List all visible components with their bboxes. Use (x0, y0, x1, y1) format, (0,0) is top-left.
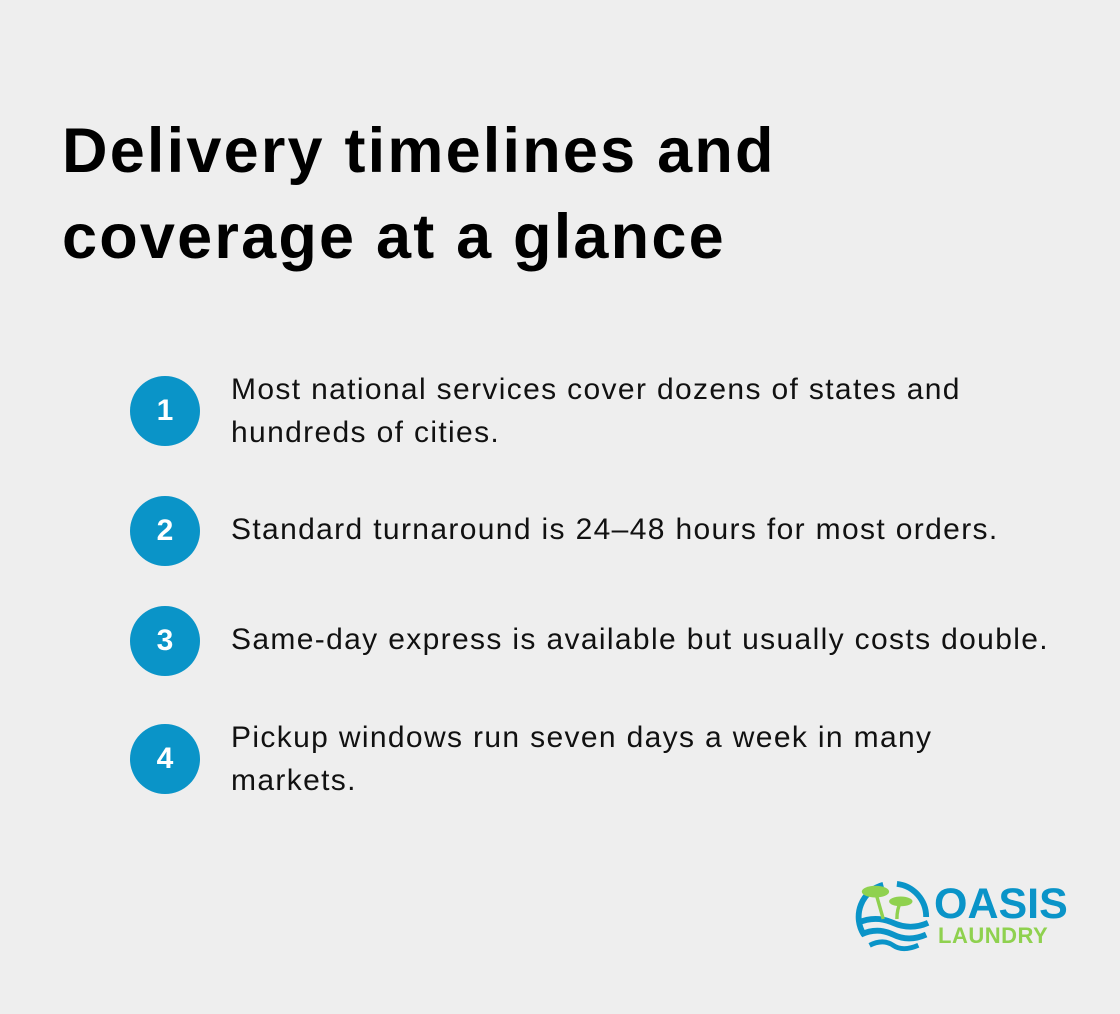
text 4: markets. (231, 764, 357, 797)
logo: LAUNDRY (938, 923, 1048, 948)
text 4: Pickup windows run seven days a week in many (231, 721, 932, 754)
title: coverage at a glance (62, 202, 726, 272)
badge 1 (130, 376, 200, 446)
text 1: hundreds of cities. (231, 416, 500, 449)
badge 4: 4 (157, 742, 173, 775)
badge 3 (130, 606, 200, 676)
badge 4 (130, 724, 200, 794)
badge 1: 1 (157, 394, 173, 427)
badge 2 (130, 496, 200, 566)
title: Delivery timelines and (62, 116, 776, 186)
text 1: Most national services cover dozens of states and (231, 373, 961, 406)
text 1 (231, 373, 961, 449)
badge 3: 3 (157, 624, 173, 657)
text 4 (231, 721, 932, 797)
text 2: Standard turnaround is 24–48 hours for most orders. (231, 513, 999, 546)
text 3: Same-day express is available but usually costs double. (231, 623, 1049, 656)
badge 2: 2 (157, 514, 173, 547)
icon: palm circle (856, 881, 930, 952)
logo text: OASIS (934, 880, 1068, 928)
title (62, 116, 776, 272)
logo (856, 880, 1068, 952)
